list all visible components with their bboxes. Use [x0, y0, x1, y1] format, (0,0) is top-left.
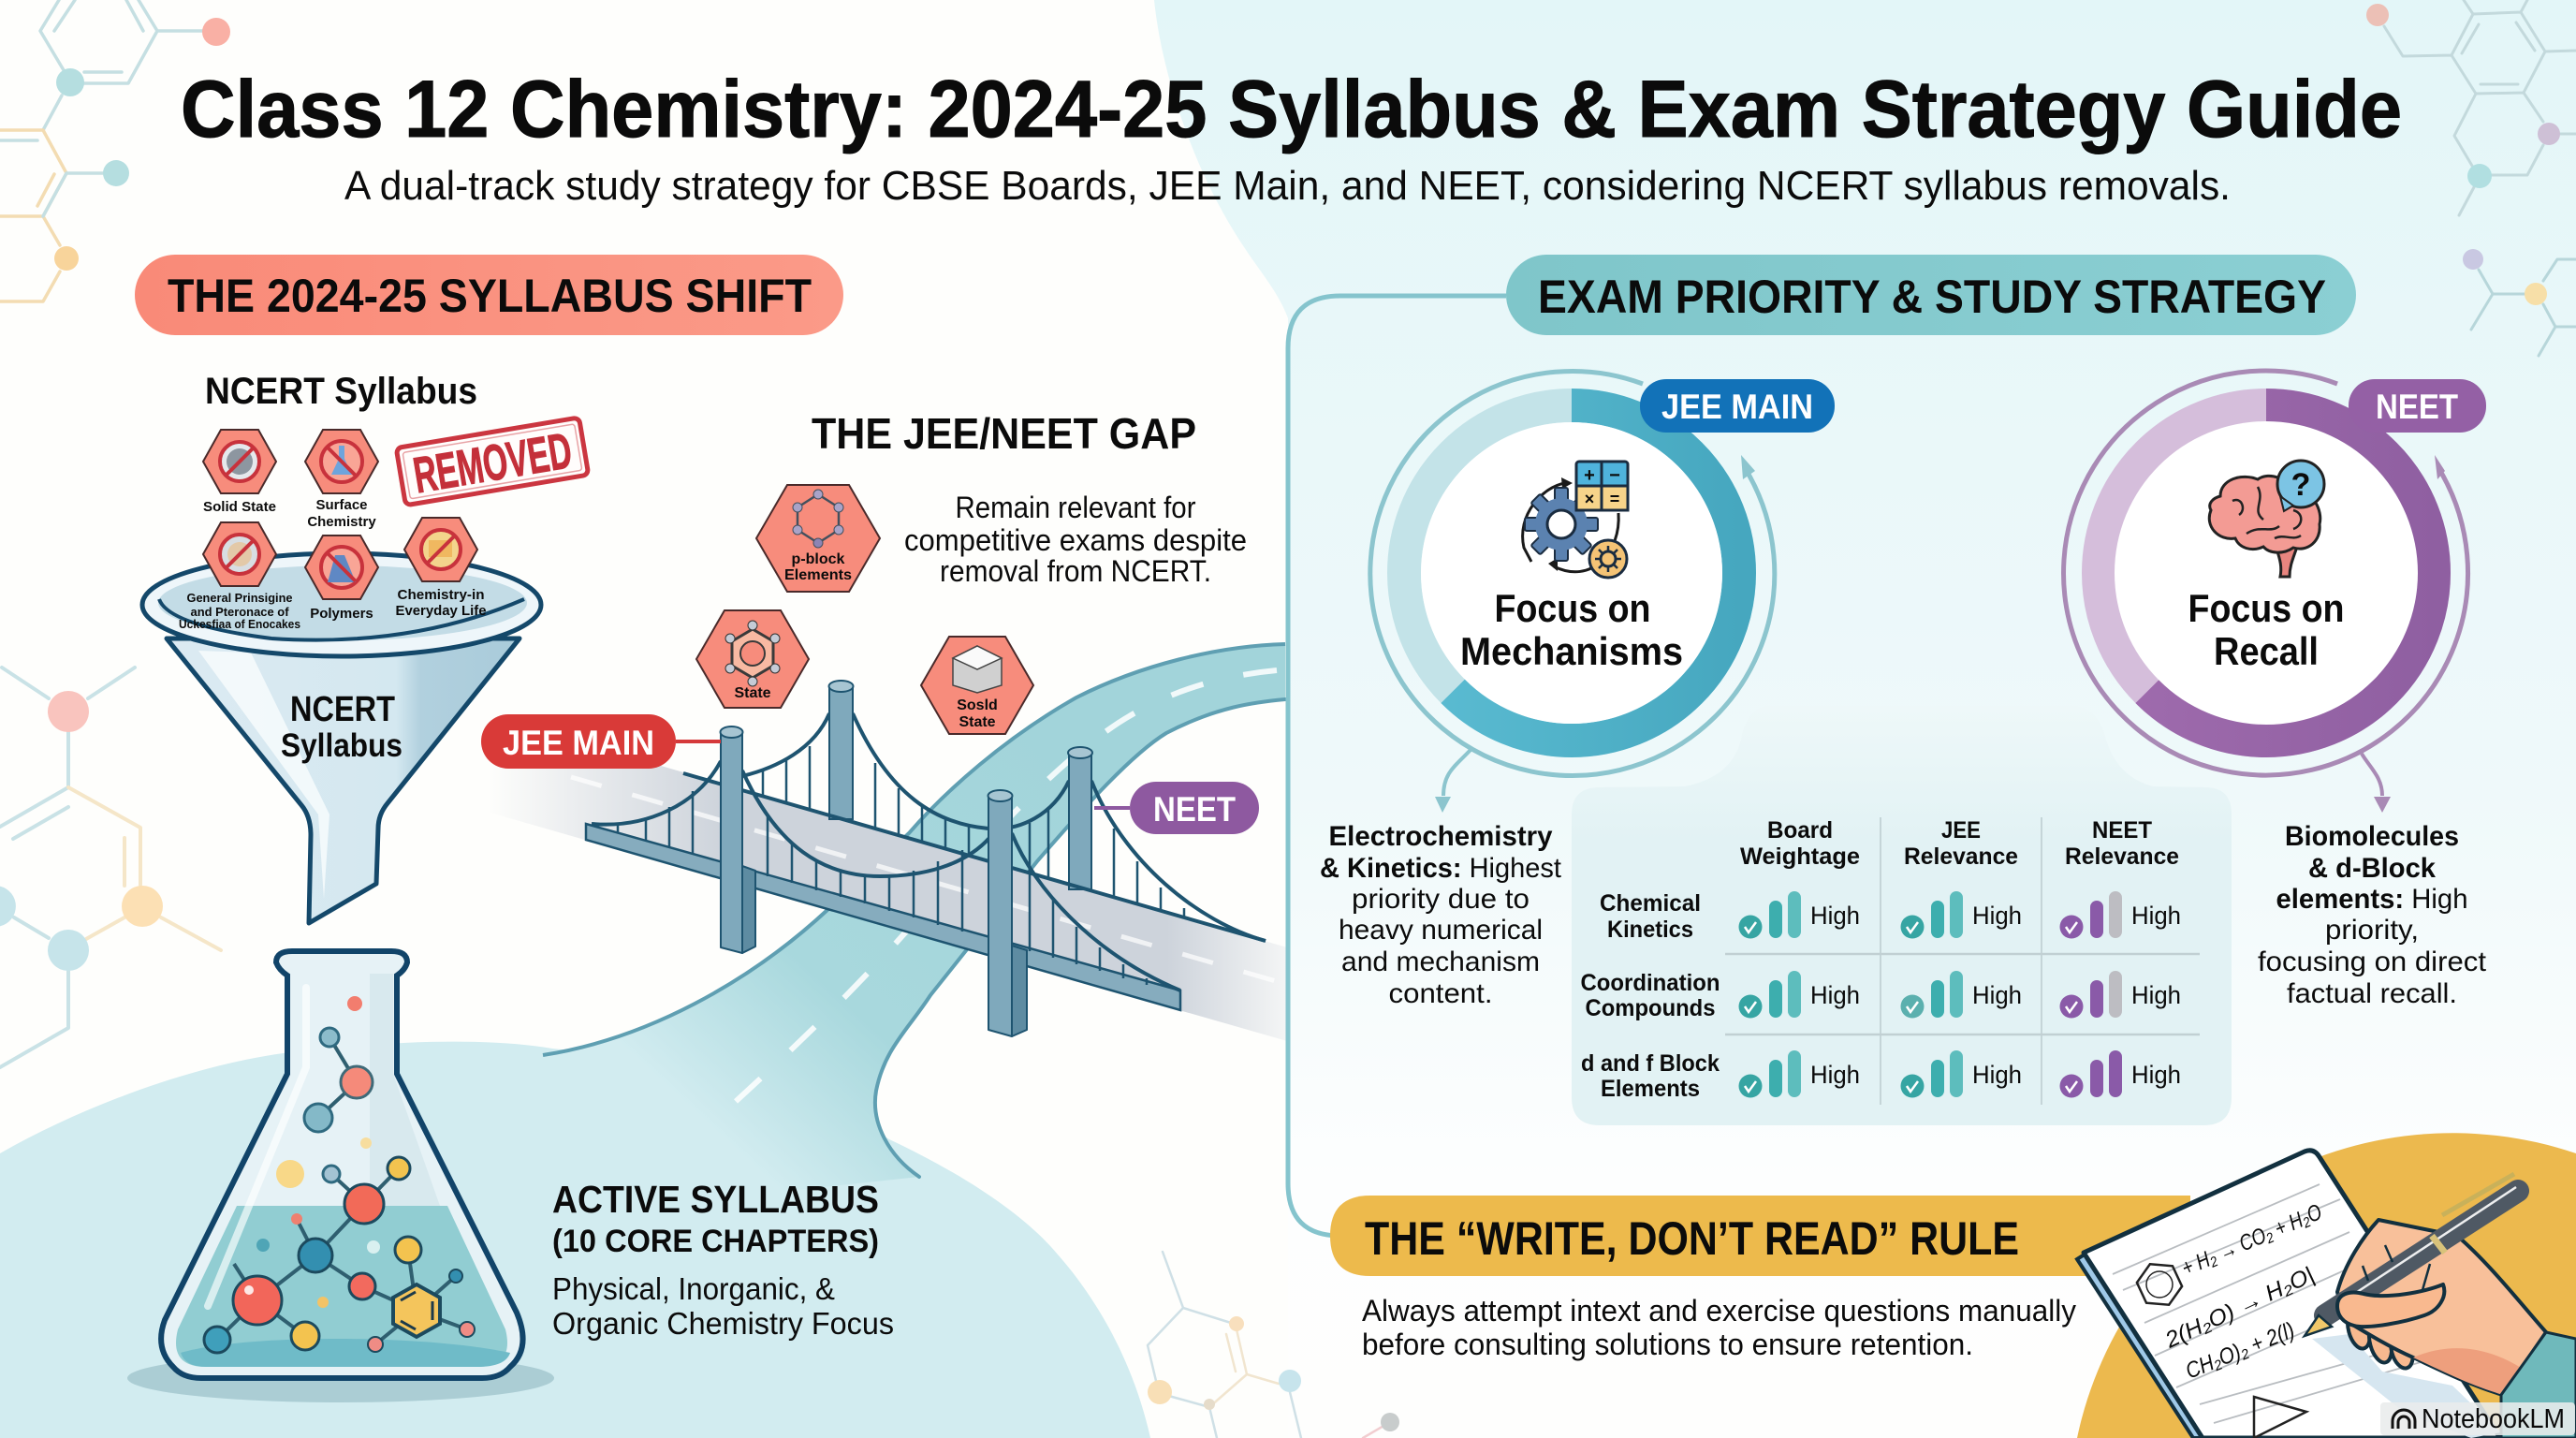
yellow circle behind notebook: [2077, 1133, 2576, 1438]
removed chapter: general principles: [179, 522, 300, 631]
row: coordination compounds: High: [1810, 981, 1860, 1009]
relevance table: [1580, 817, 2200, 1105]
row: chemical kinetics: Kinetics: [1607, 917, 1693, 943]
row: chemical kinetics: High: [1972, 902, 2022, 930]
icon: gear, calculator, cycle: [1523, 462, 1628, 578]
text: remain relevant: competitive exams despite: [904, 523, 1247, 557]
title: Class 12 Chemistry: 2024-25 Syllabus & Exam Strategy Guide: [181, 65, 2402, 154]
removed chapter: chemistry in everyday life: Chemistry-in: [397, 587, 485, 603]
flask with molecules: [127, 951, 554, 1402]
removed chapter: chemistry in everyday life: Everyday Life: [395, 603, 487, 619]
heading: write, don't read rule: THE “WRITE, DON’T READ” RULE: [1365, 1212, 2019, 1265]
column headers: Board: [1767, 817, 1833, 844]
icon: gear, calculator, cycle: +: [1584, 465, 1595, 486]
removed chapter: surface chemistry: Surface: [315, 497, 368, 513]
column headers: JEE: [1941, 817, 1981, 844]
decorative molecule: left middle: [0, 668, 221, 1067]
removed chapter: polymers: [305, 536, 378, 622]
hexagon: solid state cube: Sosld: [957, 697, 998, 713]
funnel label: NCERT: [290, 690, 395, 729]
section heading: the 2024-25 syllabus shift: [135, 255, 843, 335]
row: chemical kinetics: High: [1810, 902, 1860, 930]
removed chapter: general principles: and Pteronace of: [191, 605, 289, 619]
text: active syllabus: [552, 1178, 894, 1341]
removed chapter: general principles: General Prinsigine: [187, 591, 292, 605]
label: NEET (bridge): [1094, 782, 1259, 834]
arrow: NEET to biomolecules: [2362, 754, 2391, 813]
text: biomolecules and d-block: & d-Block: [2308, 853, 2436, 884]
row: coordination compounds: High: [2131, 981, 2181, 1009]
heading: write, don't read rule: [1330, 1196, 2190, 1276]
removed chapter: surface chemistry: Chemistry: [307, 514, 376, 530]
funnel: Syllabus: [281, 727, 402, 764]
text: remain relevant: Remain relevant for: [955, 491, 1196, 524]
hexagon: p-block elements: [756, 485, 880, 592]
removed chapter: polymers: Polymers: [310, 606, 373, 622]
icon: brain with question bubble: [2209, 461, 2324, 577]
row: coordination compounds: Coordination: [1580, 970, 1720, 996]
removed chapter: surface chemistry: [305, 430, 378, 530]
text: active syllabus: Organic Chemistry Focus: [552, 1306, 894, 1341]
text: electrochemistry and kinetics: heavy numerical: [1339, 915, 1543, 946]
icon: gear, calculator, cycle: =: [1610, 490, 1619, 508]
hexagon: solid state cube: State: [959, 714, 996, 730]
ring: NEET focus on recall: Recall: [2214, 629, 2319, 673]
subtitle: A dual-track study strategy for CBSE Boards, JEE Main, and NEET, considering NCERT syllabus removals.: [344, 163, 2231, 209]
road: JEE track: [487, 715, 1287, 1041]
row: d and f block elements: [1581, 1050, 2181, 1102]
hexagon: p-block elements: Elements: [784, 567, 852, 583]
row: coordination compounds: [1580, 970, 2181, 1021]
heading: NCERT syllabus: NCERT Syllabus: [205, 371, 477, 412]
hexagon: state: State: [734, 685, 771, 701]
text: electrochemistry and kinetics: Electrochemistry: [1329, 821, 1553, 852]
text: write rule description: [1362, 1294, 2076, 1361]
text: biomolecules and d-block: priority,: [2325, 915, 2419, 946]
label: JEE main (bridge): JEE MAIN: [503, 724, 654, 762]
row: coordination compounds: Compounds: [1586, 995, 1715, 1021]
removed chapter: solid state: [203, 430, 276, 515]
text: electrochemistry and kinetics: and mechanism: [1341, 946, 1540, 977]
text: biomolecules and d-block: focusing on direct: [2258, 946, 2487, 977]
icon: gear, calculator, cycle: ×: [1585, 490, 1594, 508]
row: d and f block elements: Elements: [1601, 1076, 1700, 1102]
removed chapter: general principles: Uckesfiaa of Enocakes: [179, 617, 300, 631]
text: active syllabus: Physical, Inorganic, &: [552, 1271, 835, 1306]
ring: JEE main focus on mechanisms: Mechanisms: [1460, 629, 1683, 673]
decorative molecule: top left: [0, 0, 230, 301]
watermark: NotebookLM: NotebookLM: [2422, 1404, 2565, 1434]
text: write rule description: Always attempt intext and exercise questions manually: [1362, 1294, 2076, 1328]
table background panel: [1572, 706, 2232, 1125]
row: d and f block elements: High: [1810, 1061, 1860, 1089]
row: chemical kinetics: High: [2131, 902, 2181, 930]
section heading: the 2024-25 syllabus shift: THE 2024-25 SYLLABUS SHIFT: [168, 270, 812, 322]
stamp: removed: REMOVED: [410, 422, 576, 504]
section heading: exam priority and study strategy: [1506, 255, 2356, 335]
column headers: NEET: [2092, 817, 2152, 844]
panel outline connector: [1288, 296, 1506, 1236]
removed chapter: solid state: Solid State: [203, 499, 276, 515]
row: d and f block elements: d and f Block: [1581, 1050, 1720, 1077]
label: JEE main (bridge): [481, 714, 721, 769]
text: biomolecules and d-block: Biomolecules: [2285, 821, 2459, 852]
ring: NEET focus on recall: [2064, 371, 2468, 775]
decorative molecule: bottom middle: [1148, 1252, 1399, 1438]
text: remain relevant: removal from NCERT.: [940, 554, 1211, 588]
pill: JEE main: [1640, 379, 1835, 433]
label: focus on recall: Focus on: [2188, 586, 2344, 630]
hexagon: solid state cube: [921, 637, 1033, 734]
text: electrochemistry and kinetics: priority due to: [1352, 884, 1530, 915]
icon: brain with question bubble: ?: [2291, 467, 2310, 503]
text: biomolecules and d-block: elements: High: [2276, 884, 2467, 915]
decorative molecule: top right: [2366, 0, 2576, 356]
funnel: [142, 553, 541, 923]
pill: NEET: NEET: [2376, 388, 2458, 426]
illustration: notebook with handwriting: + H₂ → CO₂ + H₂O: [2178, 1199, 2326, 1282]
removed chapter: chemistry in everyday life: [395, 518, 487, 619]
column headers: Relevance: [1904, 844, 2018, 870]
arrow: JEE to electrochemistry: [1435, 750, 1471, 813]
column headers: Relevance: [2065, 844, 2179, 870]
section heading: exam priority and study strategy: EXAM PRIORITY & STUDY STRATEGY: [1538, 271, 2326, 323]
illustration: notebook with handwriting: CH₂O)₂ + 2(l): [2182, 1317, 2298, 1385]
label: focus on mechanisms: Focus on: [1494, 586, 1651, 630]
pill: NEET: [2349, 379, 2486, 433]
text: active syllabus: (10 CORE CHAPTERS): [552, 1224, 879, 1259]
heading: the JEE/NEET gap: THE JEE/NEET GAP: [812, 409, 1196, 458]
column headers: Weightage: [1740, 844, 1860, 870]
text: active syllabus: ACTIVE SYLLABUS: [552, 1178, 879, 1221]
illustration: notebook with handwriting: 2(H₂O) → H₂O|: [2160, 1262, 2318, 1354]
text: biomolecules and d-block: [2258, 821, 2487, 1009]
text: write rule description: before consulting solutions to ensure retention.: [1362, 1328, 1973, 1361]
row: chemical kinetics: [1600, 890, 2181, 943]
column headers: [1740, 817, 2179, 870]
illustration: notebook with handwriting: [2077, 1151, 2500, 1438]
row: d and f block elements: High: [1972, 1061, 2022, 1089]
text: electrochemistry and kinetics: & Kinetics: Highest: [1320, 853, 1562, 884]
row: d and f block elements: High: [2131, 1061, 2181, 1089]
hexagon: p-block elements: p-block: [792, 551, 845, 567]
ring: JEE main focus on mechanisms: [1370, 371, 1775, 775]
hexagon: state: [696, 610, 809, 708]
text: electrochemistry and kinetics: [1320, 821, 1562, 1009]
stamp: removed: [396, 418, 589, 506]
icon: gear, calculator, cycle: −: [1609, 465, 1620, 486]
row: coordination compounds: High: [1972, 981, 2022, 1009]
suspension bridge: [586, 681, 1266, 1036]
illustration: hand holding pen: [2305, 1174, 2576, 1438]
row: chemical kinetics: Chemical: [1600, 890, 1701, 917]
text: biomolecules and d-block: factual recall.: [2287, 978, 2457, 1009]
diverging road to NEET: [543, 644, 1285, 1217]
pill: JEE main: JEE MAIN: [1661, 388, 1813, 426]
label: NEET (bridge): NEET: [1153, 790, 1236, 829]
text: remain relevant: [904, 491, 1247, 588]
text: electrochemistry and kinetics: content.: [1389, 978, 1492, 1009]
